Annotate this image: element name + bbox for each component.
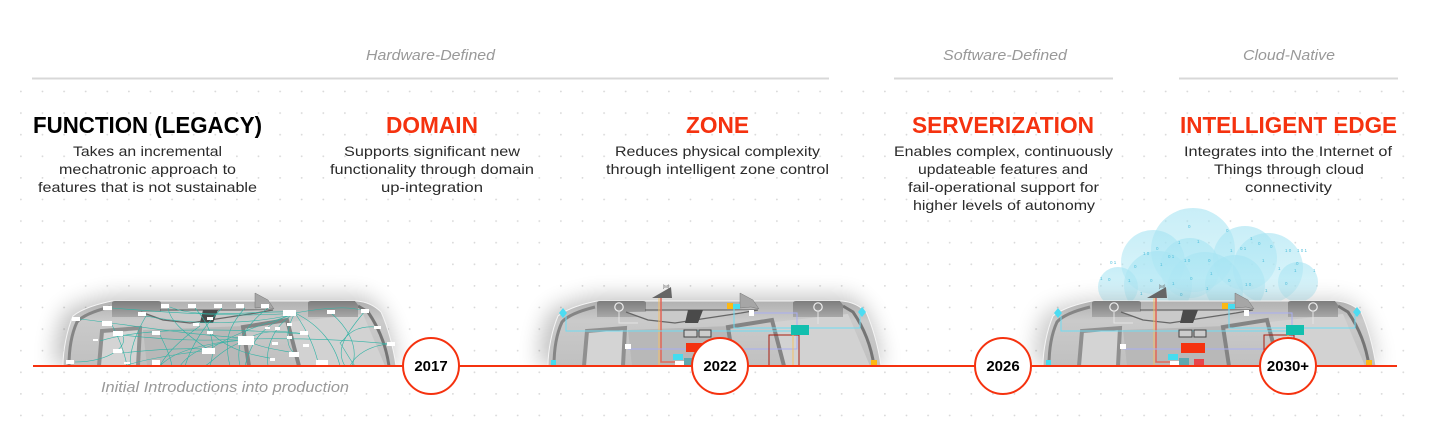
binary digits: 0 xyxy=(1226,228,1229,233)
binary digits: 1 0 xyxy=(1143,251,1150,256)
binary digits: 1 xyxy=(1197,239,1200,244)
binary digits: 0 1 xyxy=(1110,260,1117,265)
milestone 2030+ xyxy=(1260,338,1316,394)
milestone 2030+: 2030+ xyxy=(1267,358,1309,375)
production note: Initial Introductions into production xyxy=(101,379,349,396)
column: Zone: ZONE xyxy=(686,112,749,138)
milestone 2022: 2022 xyxy=(703,358,737,375)
binary digits xyxy=(1100,224,1316,297)
binary digits: 1 0 xyxy=(1245,282,1252,287)
binary digits: 1 xyxy=(1172,281,1175,286)
car: zone architecture xyxy=(539,284,883,366)
column: Serverization: SERVERIZATION xyxy=(912,112,1094,138)
binary digits: 1 xyxy=(1294,268,1297,273)
binary digits: 0 xyxy=(1134,264,1137,269)
dotted background xyxy=(20,90,1420,425)
column: Intelligent Edge xyxy=(1180,112,1397,195)
binary digits: 0 xyxy=(1285,281,1288,286)
column: Intelligent Edge: Things through cloud xyxy=(1214,161,1364,177)
column: Zone xyxy=(606,112,829,177)
binary digits: 1 xyxy=(1313,268,1316,273)
binary digits: 1 xyxy=(1265,288,1268,293)
column: Function (Legacy): Takes an incremental xyxy=(73,143,222,159)
milestone 2017 xyxy=(403,338,459,394)
binary digits: 0 1 xyxy=(1240,246,1247,251)
binary digits: 1 xyxy=(1230,248,1233,253)
milestone 2026 xyxy=(975,338,1031,394)
column: Intelligent Edge: connectivity xyxy=(1245,179,1332,195)
column: Serverization: updateable features and xyxy=(918,161,1088,177)
cloud with binary data xyxy=(1098,208,1318,300)
milestone 2026: 2026 xyxy=(986,358,1020,375)
binary digits: 0 xyxy=(1156,246,1159,251)
binary digits: 1 0 xyxy=(1184,258,1191,263)
binary digits: 1 0 1 xyxy=(1297,248,1308,253)
column: Domain: Supports significant new xyxy=(344,143,521,159)
column: Intelligent Edge: Integrates into the Internet of xyxy=(1184,143,1392,159)
column: Domain: up-integration xyxy=(381,179,483,195)
binary digits: 0 xyxy=(1208,258,1211,263)
column: Function (Legacy) xyxy=(33,112,262,195)
car: function architecture with tangled wiring xyxy=(54,293,398,366)
binary digits: 0 xyxy=(1270,244,1273,249)
sensor label: [M] xyxy=(663,284,669,289)
column: Domain xyxy=(330,112,534,195)
binary digits: 1 xyxy=(1278,266,1281,271)
binary digits: 1 xyxy=(1262,258,1265,263)
binary digits: 1 xyxy=(1210,271,1213,276)
column: Function (Legacy): FUNCTION (LEGACY) xyxy=(33,112,262,138)
binary digits: 0 xyxy=(1180,292,1183,297)
binary digits: 0 xyxy=(1258,241,1261,246)
binary digits: 0 xyxy=(1296,261,1299,266)
binary digits: 1 xyxy=(1100,276,1103,281)
era: Cloud-Native: Cloud-Native xyxy=(1243,47,1335,64)
milestone 2022 xyxy=(692,338,748,394)
column: Serverization: fail-operational support for xyxy=(908,179,1099,195)
milestone 2017: 2017 xyxy=(414,358,448,375)
timeline axis xyxy=(33,365,1397,367)
column: Serverization xyxy=(894,112,1113,213)
binary digits: 0 xyxy=(1188,224,1191,229)
column: Serverization: Enables complex, continuously xyxy=(894,143,1113,159)
sensor label: [M] xyxy=(1159,284,1165,289)
column: Intelligent Edge: INTELLIGENT EDGE xyxy=(1180,112,1397,138)
binary digits: 1 xyxy=(1128,278,1131,283)
binary digits: 1 xyxy=(1140,291,1143,296)
wiring harness xyxy=(75,307,390,366)
column: Function (Legacy): mechatronic approach to xyxy=(59,161,236,177)
wiring modules xyxy=(66,304,395,366)
column: Function (Legacy): features that is not sustainable xyxy=(38,179,257,195)
binary digits: 0 1 xyxy=(1168,254,1175,259)
era: Hardware-Defined: Hardware-Defined xyxy=(366,47,496,64)
binary digits: 1 0 xyxy=(1285,248,1292,253)
binary digits: 1 xyxy=(1160,262,1163,267)
binary digits: 0 xyxy=(1228,278,1231,283)
binary digits: 0 xyxy=(1150,278,1153,283)
column: Domain: functionality through domain xyxy=(330,161,534,177)
central compute block xyxy=(1181,343,1205,366)
column: Domain: DOMAIN xyxy=(386,112,478,138)
binary digits: 0 xyxy=(1190,276,1193,281)
binary digits: 1 xyxy=(1178,240,1181,245)
column: Zone: Reduces physical complexity xyxy=(615,143,820,159)
binary digits: 1 xyxy=(1250,236,1253,241)
column: Zone: through intelligent zone control xyxy=(606,161,829,177)
binary digits: 0 xyxy=(1108,277,1111,282)
car: intelligent edge architecture xyxy=(1034,284,1378,366)
binary digits: 1 xyxy=(1206,286,1209,291)
era: Software-Defined: Software-Defined xyxy=(943,47,1068,64)
column: Serverization: higher levels of autonomy xyxy=(913,197,1095,213)
